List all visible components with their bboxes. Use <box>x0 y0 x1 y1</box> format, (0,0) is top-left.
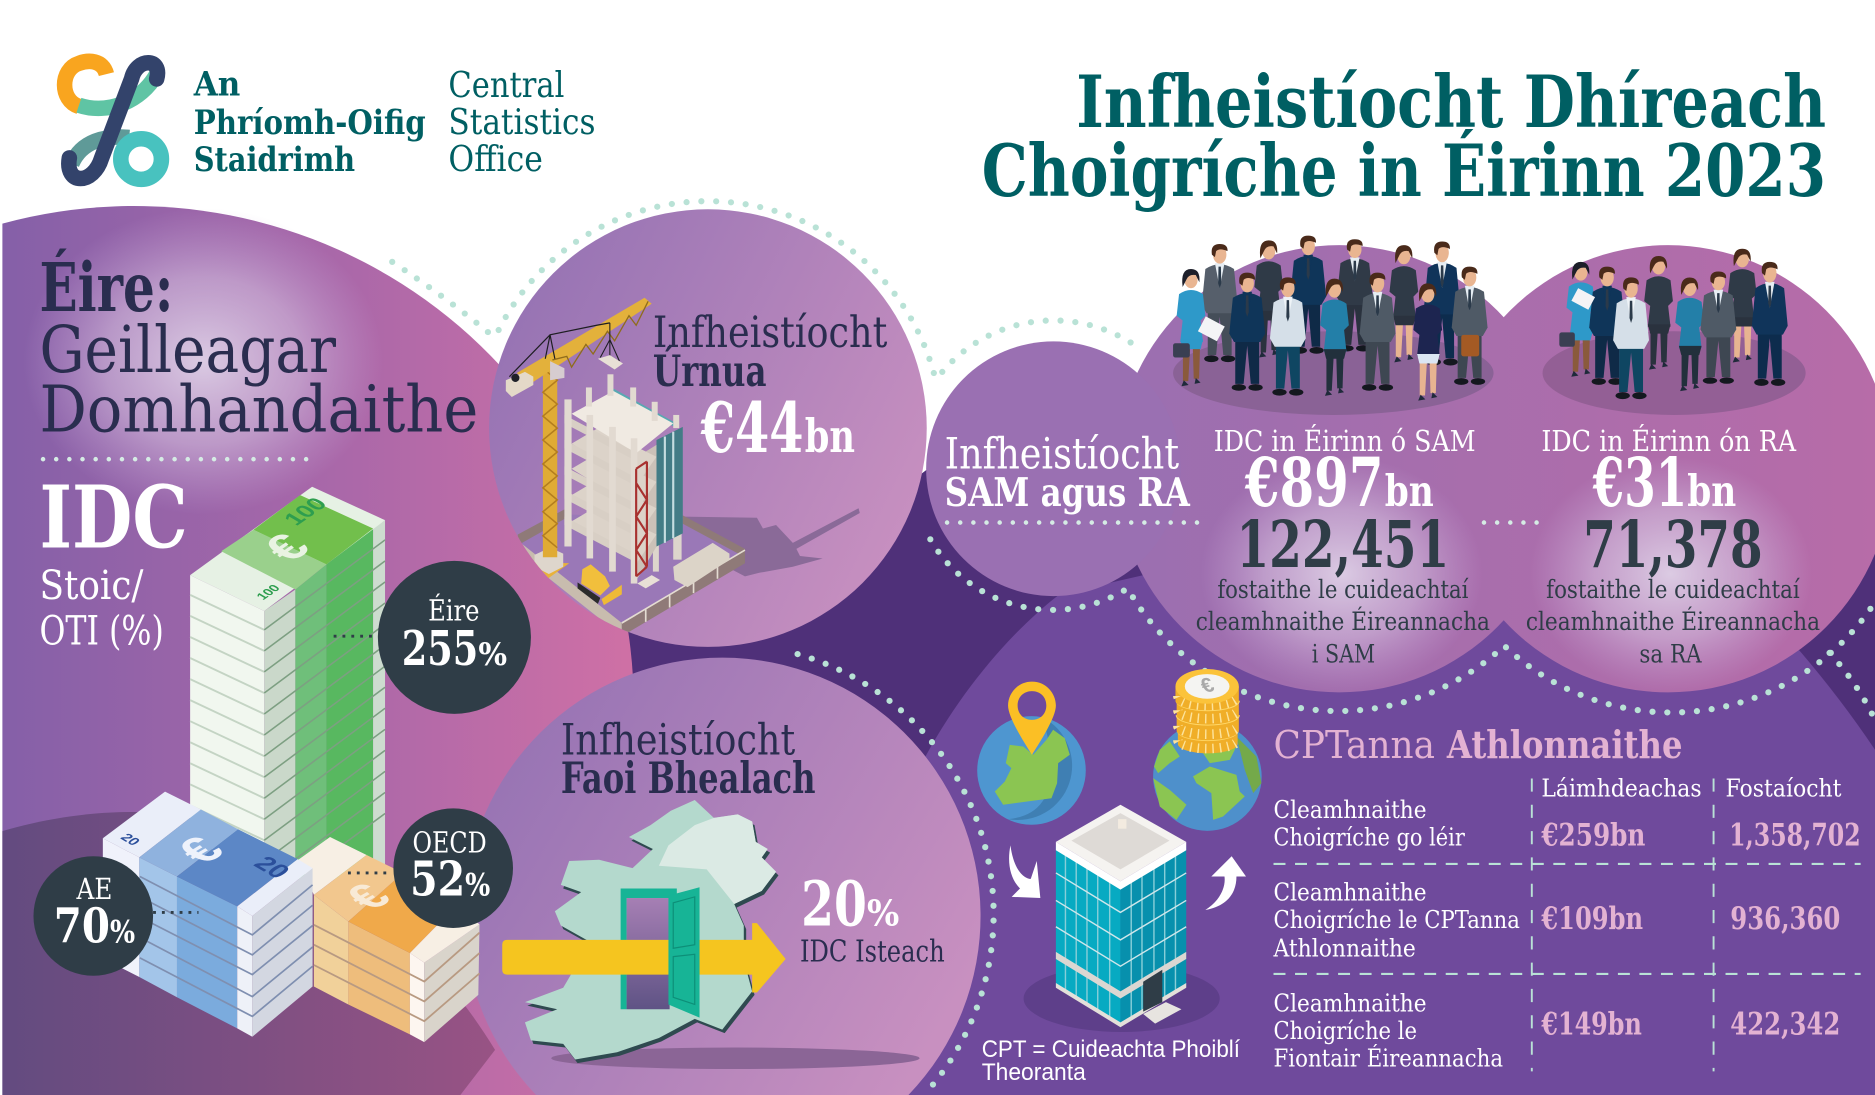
row: all foreign affiliates <box>1274 796 1861 853</box>
door frame <box>621 888 677 1009</box>
row: Irish enterprises: €149bn <box>1541 1006 1642 1042</box>
logo text: Statistics <box>448 102 596 143</box>
chart: blue money stack AE: 20 <box>248 853 295 883</box>
heading: Éire Geilleagar Domhandaithe: Domhandaithe <box>39 373 478 448</box>
stats: RA: €31 <box>1592 443 1687 522</box>
lower columns behind cladding <box>673 531 682 560</box>
heading: IDC Stoic/OTI (%): Stoic/ <box>39 561 144 609</box>
circle: Infheistíocht Úrnua <box>489 209 927 647</box>
logo text: An <box>193 65 240 104</box>
chart: green money stack Éire: 100 <box>278 494 333 529</box>
circle: Infheistíocht Faoi Bhealach <box>464 658 981 1095</box>
callout: AE 70%: % <box>110 914 135 950</box>
row: redomiciled PLCs: 936,360 <box>1730 901 1840 937</box>
title <box>982 60 1826 213</box>
stats: RA: fostaithe le cuideachtaí <box>1546 575 1800 604</box>
stats: SAM: cleamhnaithe Éireannacha <box>1196 605 1490 636</box>
callout: AE 70%: AE <box>76 872 112 906</box>
callout: Éire 255% <box>378 561 531 714</box>
heading: IDC Stoic/OTI (%): IDC <box>39 468 188 569</box>
yellow arrow <box>502 923 786 993</box>
logo text: Central <box>448 65 564 106</box>
icon: curved arrow into building <box>1009 845 1040 898</box>
logo text: Office <box>448 139 543 180</box>
callout: Éire 255%: % <box>478 637 507 673</box>
row: redomiciled PLCs: Cleamhnaithe <box>1274 878 1427 906</box>
heading: Athlonnaithe <box>1446 723 1682 768</box>
row: Irish enterprises: Fiontair Éireannacha <box>1274 1044 1503 1073</box>
heading: Éire Geilleagar Domhandaithe <box>39 248 478 448</box>
icon: office building <box>1024 805 1220 1032</box>
stats: RA: bn <box>1687 467 1736 517</box>
map of Ireland with door and arrow <box>502 800 920 1069</box>
logo text <box>193 65 596 180</box>
callout: AE 70%: 70 <box>54 898 110 954</box>
table: CPTanna Athlonnaithe <box>1273 723 1861 1073</box>
glow: UK employment <box>1529 457 1812 691</box>
cab <box>550 361 564 380</box>
crane jib <box>517 298 652 383</box>
stats: SAM: fostaithe le cuideachtaí <box>1217 575 1469 604</box>
open door leaf <box>668 887 700 1018</box>
callout: OECD 52%: 52 <box>410 852 465 908</box>
heading: IDC Stoic/OTI (%) <box>39 468 188 655</box>
figure: 20% IDC Isteach <box>800 868 945 969</box>
icon: world globe with coin stack <box>1153 669 1262 831</box>
teal cladding <box>613 389 683 546</box>
stats: SAM: i SAM <box>1312 639 1375 668</box>
callout: Éire 255%: 255 <box>402 621 478 677</box>
glow: USA employment <box>1201 457 1483 691</box>
callout: OECD 52% <box>393 808 513 928</box>
load on hook <box>600 323 619 361</box>
stats: RA: IDC in Éirinn ón RA <box>1541 424 1796 458</box>
row: redomiciled PLCs: Choigríche le CPTanna <box>1274 906 1520 934</box>
row: all foreign affiliates: €259bn <box>1541 817 1645 853</box>
column headers <box>1541 774 1842 802</box>
red scaffold <box>636 462 647 576</box>
chart: orange money stack OECD <box>298 837 480 1042</box>
background: lighter purple panel <box>885 514 1875 1095</box>
beams <box>564 415 631 560</box>
heading: Faoi Bhealach: Infheistíocht <box>561 716 795 766</box>
row: Irish enterprises: 422,342 <box>1730 1006 1840 1042</box>
coins <box>1175 669 1239 753</box>
stats: SAM: IDC in Éirinn ó SAM <box>1214 424 1476 458</box>
heading: Éire Geilleagar Domhandaithe: Éire: <box>39 248 173 327</box>
leader <box>334 635 378 637</box>
logo text: Staidrimh <box>194 140 355 179</box>
stats: RA: sa RA <box>1639 639 1702 668</box>
circle: IDC from UK <box>1445 245 1875 692</box>
stats: SAM: €897 <box>1244 443 1384 522</box>
heading: Infheistíocht SAM agus RA: Infheistíocht <box>945 430 1179 480</box>
row: Irish enterprises <box>1274 990 1840 1073</box>
dotted connector lines <box>392 201 1874 1091</box>
heading: Infheistíocht SAM agus RA: SAM agus RA <box>945 470 1191 516</box>
illustration: construction site with crane <box>506 298 860 636</box>
row: redomiciled PLCs: €109bn <box>1541 901 1643 937</box>
heading: Infheistíocht Úrnua: Infheistíocht <box>653 308 887 358</box>
back wall left <box>518 509 564 545</box>
row: Irish enterprises: Cleamhnaithe <box>1274 990 1427 1018</box>
heading: Faoi Bhealach <box>561 716 816 804</box>
lower shaded area <box>2 812 495 1095</box>
cables <box>509 323 610 377</box>
column headers: Láimhdeachas <box>1541 774 1702 802</box>
back wall right <box>683 515 745 557</box>
panel: Éire globalised economy <box>2 206 634 1095</box>
icon: curved arrow out of building <box>1205 856 1246 910</box>
chart: blue money stack AE <box>103 792 313 1037</box>
logo text: Phríomh-Oifig <box>194 103 426 142</box>
callout: OECD 52%: % <box>465 868 490 904</box>
note: CPT definition <box>982 1036 1240 1086</box>
stats: SAM: bn <box>1385 467 1434 517</box>
callout: Éire 255%: Éire <box>428 594 480 628</box>
heading: Infheistíocht SAM agus RA <box>945 430 1191 516</box>
stats: RA <box>1526 424 1820 668</box>
stats: SAM: 122,451 <box>1236 507 1449 583</box>
chart: orange money stack OECD: € <box>334 877 404 917</box>
row: all foreign affiliates: Cleamhnaithe <box>1274 796 1427 824</box>
icon: globe with Ireland and pin <box>977 682 1086 825</box>
background: dark purple field <box>574 395 1875 1095</box>
chart: green money stack Éire <box>190 487 385 879</box>
heading: Infheistíocht Úrnua: Úrnua <box>653 346 767 397</box>
chart: blue money stack AE: 20 <box>117 831 144 848</box>
row: redomiciled PLCs <box>1273 878 1840 963</box>
figure: €44bn: €44 <box>700 388 804 469</box>
row: Irish enterprises: Choigríche le <box>1274 1017 1417 1045</box>
bulldozer <box>578 564 622 605</box>
note: CPT definition: Theoranta <box>982 1059 1086 1086</box>
figure: 20% IDC Isteach: 20 <box>801 868 867 941</box>
heading: Infheistíocht Úrnua <box>653 308 887 397</box>
site floor <box>518 514 745 627</box>
stats: SAM <box>1196 424 1490 668</box>
building shadow <box>683 508 860 576</box>
leader <box>153 911 199 914</box>
stats: RA: cleamhnaithe Éireannacha <box>1526 605 1820 636</box>
crane tower <box>543 359 557 557</box>
heading: Faoi Bhealach: Faoi Bhealach <box>561 754 816 804</box>
logo mark <box>65 61 161 179</box>
materials block <box>673 543 729 587</box>
counterweight <box>506 372 533 397</box>
illustration: group of people RA <box>1543 249 1806 415</box>
illustration: group of people SAM <box>1173 236 1494 415</box>
floor decks <box>572 428 656 562</box>
figure: €44bn: bn <box>805 409 855 463</box>
stats: RA: 71,378 <box>1583 507 1763 583</box>
chart: green money stack Éire: 100 <box>253 582 283 602</box>
concrete frame <box>564 374 679 584</box>
callout: OECD 52%: OECD <box>413 826 487 860</box>
row: all foreign affiliates: Choigríche go léir <box>1274 823 1465 851</box>
row: redomiciled PLCs: Athlonnaithe <box>1273 935 1416 963</box>
figure: 20% IDC Isteach: IDC Isteach <box>800 934 945 969</box>
chart: green money stack Éire: € <box>253 526 322 569</box>
circle: IDC from USA <box>1116 245 1563 692</box>
column headers: Fostaíocht <box>1726 774 1842 802</box>
front walls <box>522 544 622 630</box>
heading: IDC Stoic/OTI (%): OTI (%) <box>39 607 164 655</box>
note: CPT definition: CPT = Cuideachta Phoiblí <box>982 1036 1240 1063</box>
callout: AE 70% <box>33 856 153 976</box>
figure: 20% IDC Isteach: % <box>867 893 899 935</box>
heading: CPTanna <box>1274 723 1435 768</box>
columns <box>564 374 679 584</box>
crane base <box>533 562 569 579</box>
circle: Infheistíocht SAM agus RA <box>926 341 1181 596</box>
heading: Éire Geilleagar Domhandaithe: Geilleagar <box>39 313 336 388</box>
chart: blue money stack AE: € <box>165 829 236 871</box>
leader <box>348 872 392 874</box>
heading <box>1274 723 1682 768</box>
icon: world globe with coin stack: € <box>1197 674 1218 697</box>
